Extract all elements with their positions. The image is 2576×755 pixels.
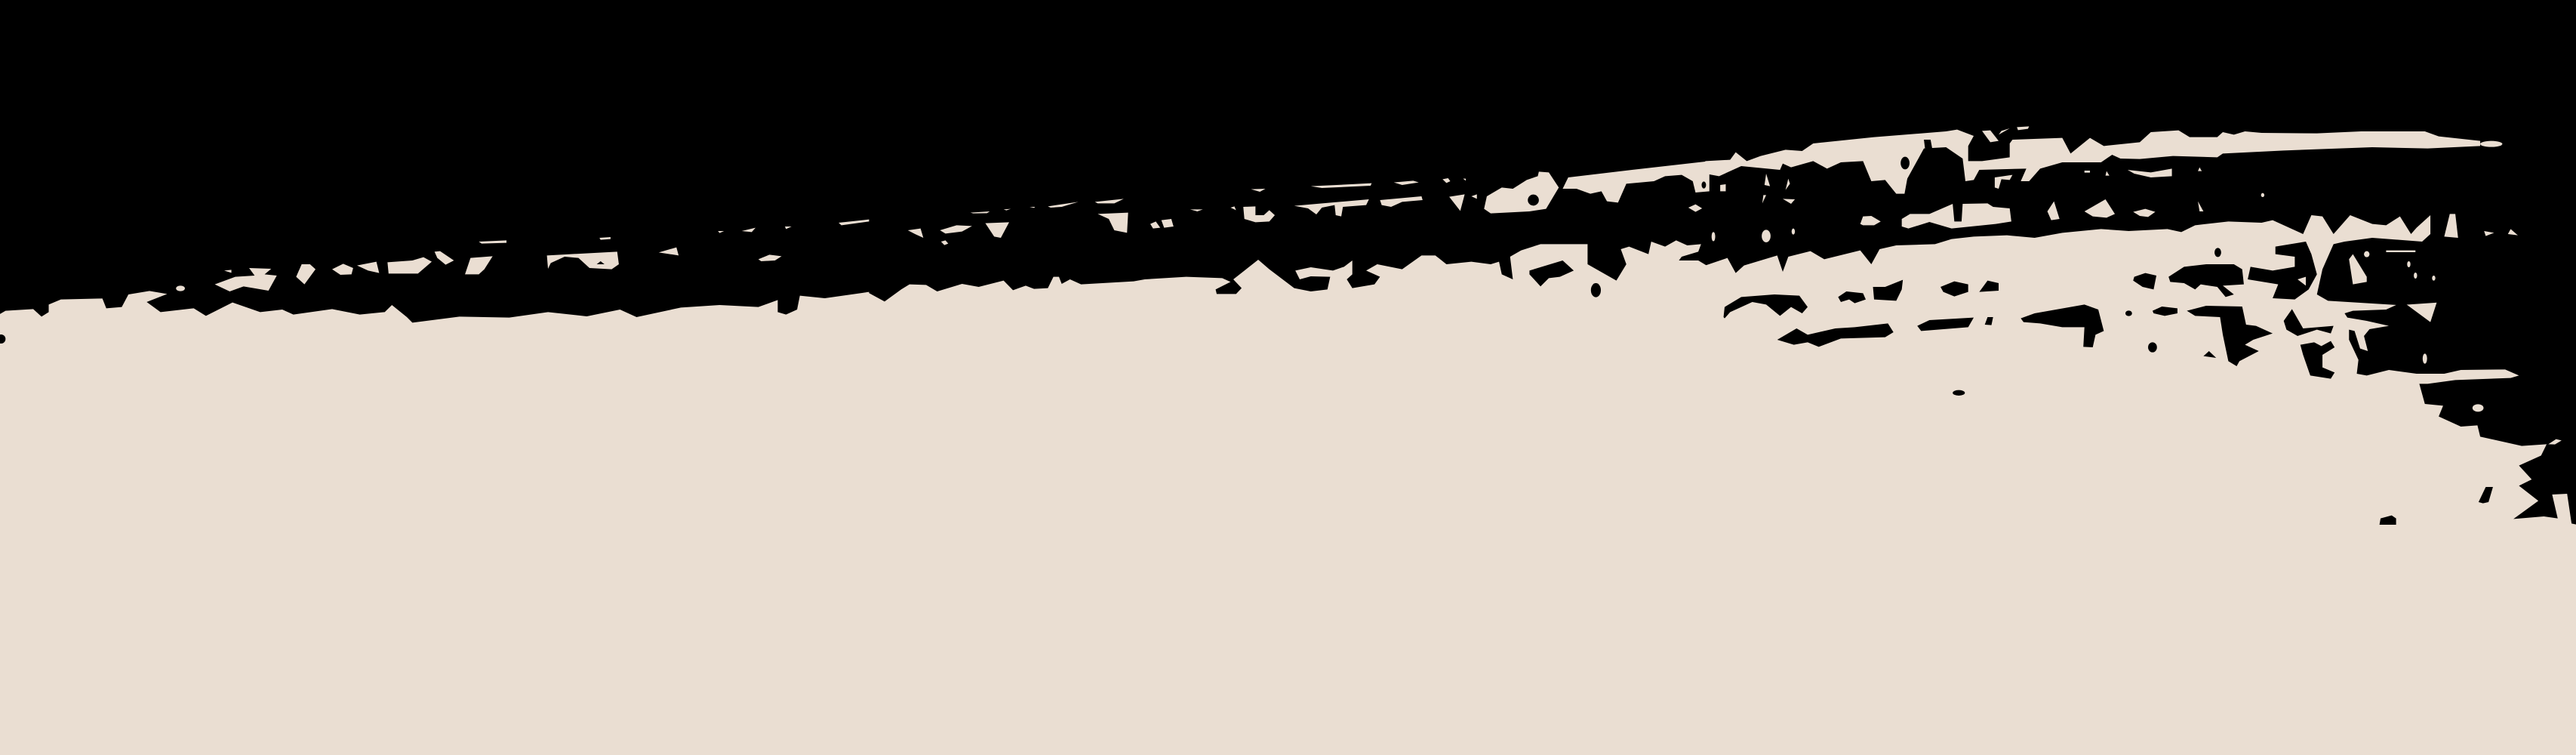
upper beige band [1705, 130, 2480, 194]
lower right ink mass and spatter [1777, 301, 2576, 525]
middle section of rough edge [867, 161, 1734, 340]
black ink field [0, 0, 2576, 355]
right section of rough edge with upper band [1705, 126, 2518, 340]
left section of rough edge [0, 220, 869, 378]
beige paper field [0, 332, 2576, 755]
